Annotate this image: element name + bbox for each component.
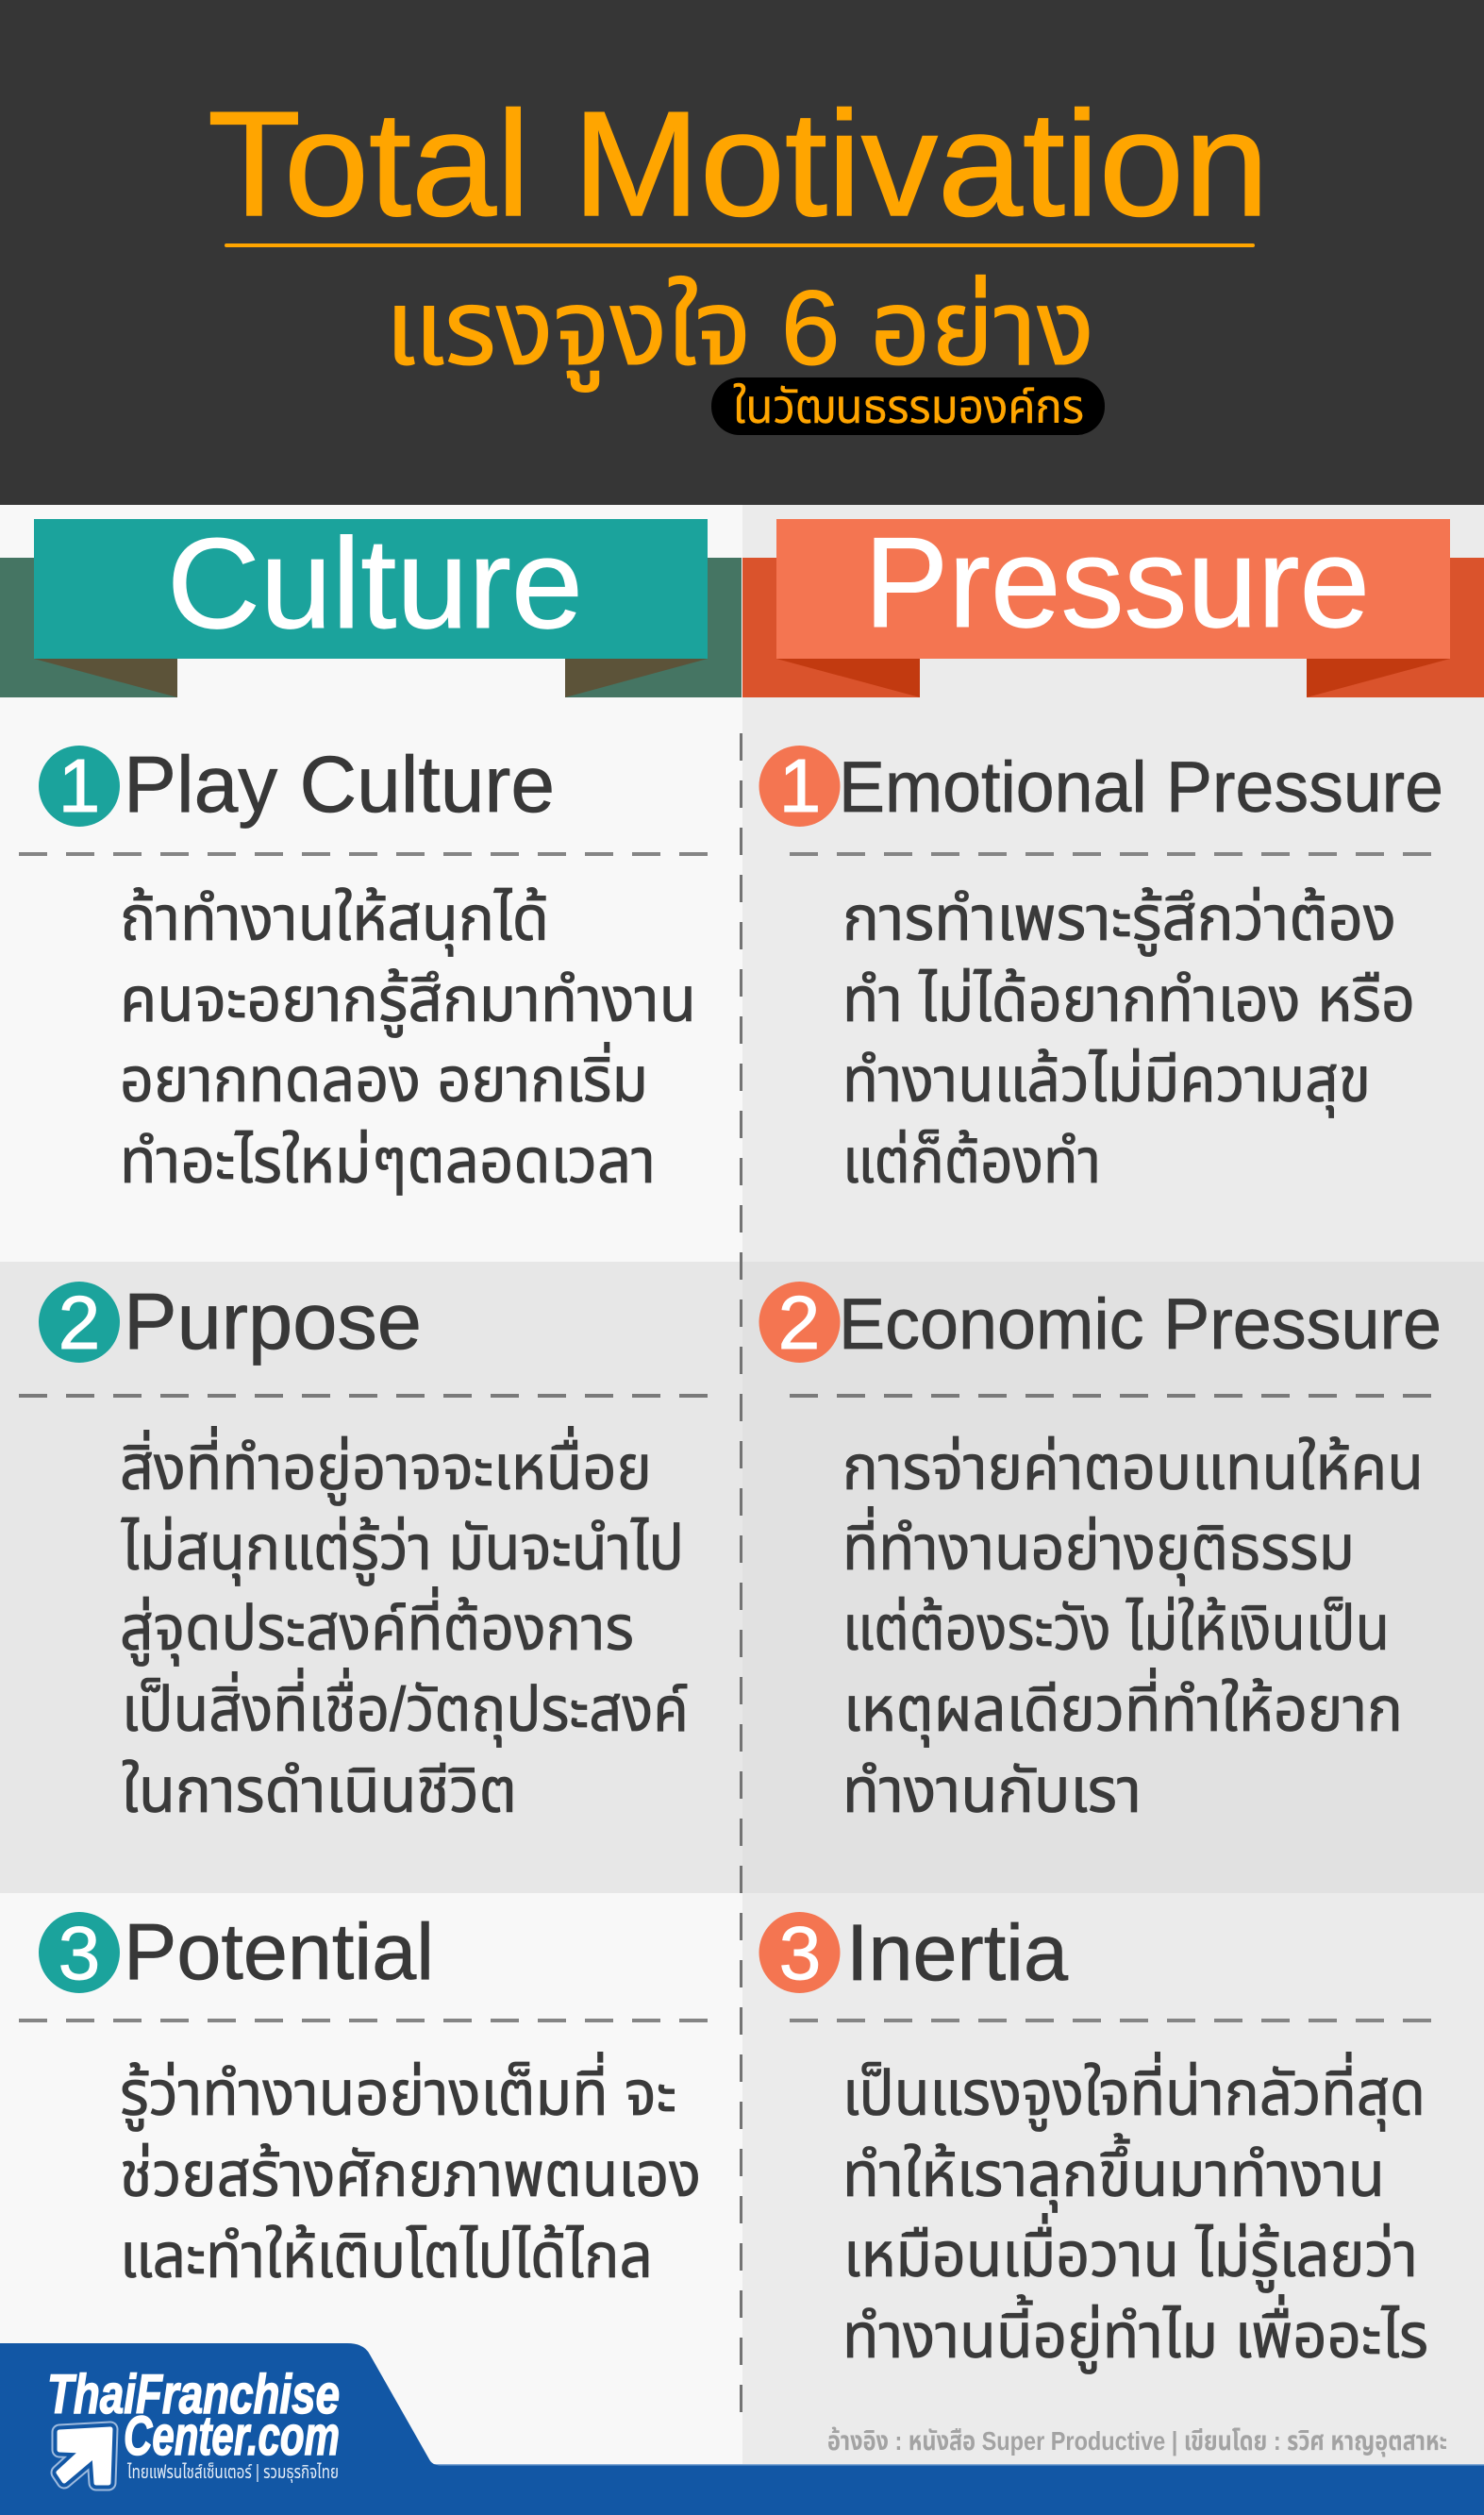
culture heading: Culture xyxy=(167,511,583,655)
number badge 3 xyxy=(759,1911,840,1995)
body text: ถ้าทำงานให้สนุกได้ xyxy=(120,883,549,956)
body text: การทำเพราะรู้สึกว่าต้อง xyxy=(842,883,1396,957)
number badge 1 xyxy=(39,744,120,828)
body text: ทำให้เราลุกขึ้นมาทำงาน xyxy=(842,2133,1385,2212)
body text: ทำ ไม่ได้อยากทำเอง หรือ xyxy=(842,964,1415,1034)
number badge 2: 2 xyxy=(58,1281,100,1365)
panel: emotional pressure xyxy=(759,744,1443,1196)
heading: purpose: Purpose xyxy=(124,1277,422,1366)
body text xyxy=(120,883,696,1196)
logo wordmark line 2: Center.com xyxy=(124,2406,340,2467)
footer blue bar xyxy=(0,2343,1484,2515)
body text: เหมือนเมื่อวาน ไม่รู้เลยว่า xyxy=(843,2213,1418,2293)
body text: ที่ทำงานอย่างยุติธรรม xyxy=(842,1506,1355,1585)
body text: ทำงานนี้อยู่ทำไม เพื่ออะไร xyxy=(842,2294,1428,2374)
panel: purpose xyxy=(19,1277,709,1825)
body text: ช่วยสร้างศักยภาพตนเอง xyxy=(120,2139,701,2209)
number badge 2 xyxy=(39,1281,120,1365)
pressure heading: Pressure xyxy=(864,511,1370,654)
body text: และทำให้เติบโตไปได้ไกล xyxy=(120,2221,653,2290)
heading: inertia: Inertia xyxy=(846,1908,1068,1997)
number badge 1 xyxy=(759,744,840,828)
body text: ทำงานแล้วไม่มีความสุข xyxy=(842,1045,1371,1117)
body text xyxy=(842,2052,1428,2374)
body text: ในการดำเนินชีวิต xyxy=(122,1755,517,1825)
subtitle pill: ในวัฒนธรรมองค์กร xyxy=(733,380,1084,433)
header panel xyxy=(0,0,1484,505)
body text xyxy=(120,2052,701,2290)
body text: แต่ก็ต้องทำ xyxy=(842,1126,1101,1196)
number badge 3 xyxy=(39,1911,120,1995)
heading: potential: Potential xyxy=(124,1907,434,1996)
number badge 1: 1 xyxy=(58,744,100,828)
body text: สิ่งที่ทำอยู่อาจจะเหนื่อย xyxy=(120,1426,652,1506)
panel: potential xyxy=(19,1907,709,2290)
logo wordmark line 1: ThaiFranchise xyxy=(47,2364,340,2425)
panel: inertia xyxy=(759,1908,1432,2374)
body text: เป็นแรงจูงใจที่น่ากลัวที่สุด xyxy=(842,2052,1426,2132)
culture banner xyxy=(0,511,742,697)
number badge 2: 2 xyxy=(778,1281,820,1365)
body text: ทำงานกับเรา xyxy=(842,1755,1142,1825)
title underline xyxy=(225,243,1255,247)
body text: ไม่สนุกแต่รู้ว่า มันจะนำไป xyxy=(121,1513,684,1586)
body text xyxy=(120,1426,689,1825)
body text: อยากทดลอง อยากเริ่ม xyxy=(120,1042,648,1115)
number badge 2 xyxy=(759,1281,840,1365)
body text: ทำอะไรใหม่ๆตลอดเวลา xyxy=(120,1126,656,1196)
number badge 3: 3 xyxy=(58,1911,100,1995)
panel: play culture xyxy=(19,740,709,1196)
logo tagline: ไทยแฟรนไชส์เซ็นเตอร์ | รวมธุรกิจไทย xyxy=(126,2462,339,2483)
body text: เป็นสิ่งที่เชื่อ/วัตถุประสงค์ xyxy=(122,1668,689,1747)
pressure banner xyxy=(742,511,1484,697)
body text: สู่จุดประสงค์ที่ต้องการ xyxy=(120,1586,634,1667)
heading: play culture: Play Culture xyxy=(124,740,555,829)
body text xyxy=(842,883,1415,1196)
body text: รู้ว่าทำงานอย่างเต็มที่ จะ xyxy=(120,2052,676,2132)
number badge 1: 1 xyxy=(779,744,821,828)
subtitle: แรงจูงใจ 6 อย่าง xyxy=(385,269,1094,393)
title: Total Motivation xyxy=(208,81,1269,247)
body text: คนจะอยากรู้สึกมาทำงาน xyxy=(120,964,696,1038)
icon: arrow xyxy=(58,2429,110,2483)
body text xyxy=(842,1433,1424,1825)
body text: เหตุผลเดียวที่ทำให้อยาก xyxy=(843,1668,1403,1747)
panel: economic pressure xyxy=(759,1281,1442,1825)
heading: economic pressure: Economic Pressure xyxy=(839,1284,1442,1365)
body text: แต่ต้องระวัง ไม่ให้เงินเป็น xyxy=(842,1593,1390,1663)
logo: thaifranchise center xyxy=(47,2364,340,2483)
number badge 3: 3 xyxy=(779,1911,821,1995)
body text: การจ่ายค่าตอบแทนให้คน xyxy=(842,1433,1424,1502)
heading: emotional pressure: Emotional Pressure xyxy=(839,747,1443,828)
